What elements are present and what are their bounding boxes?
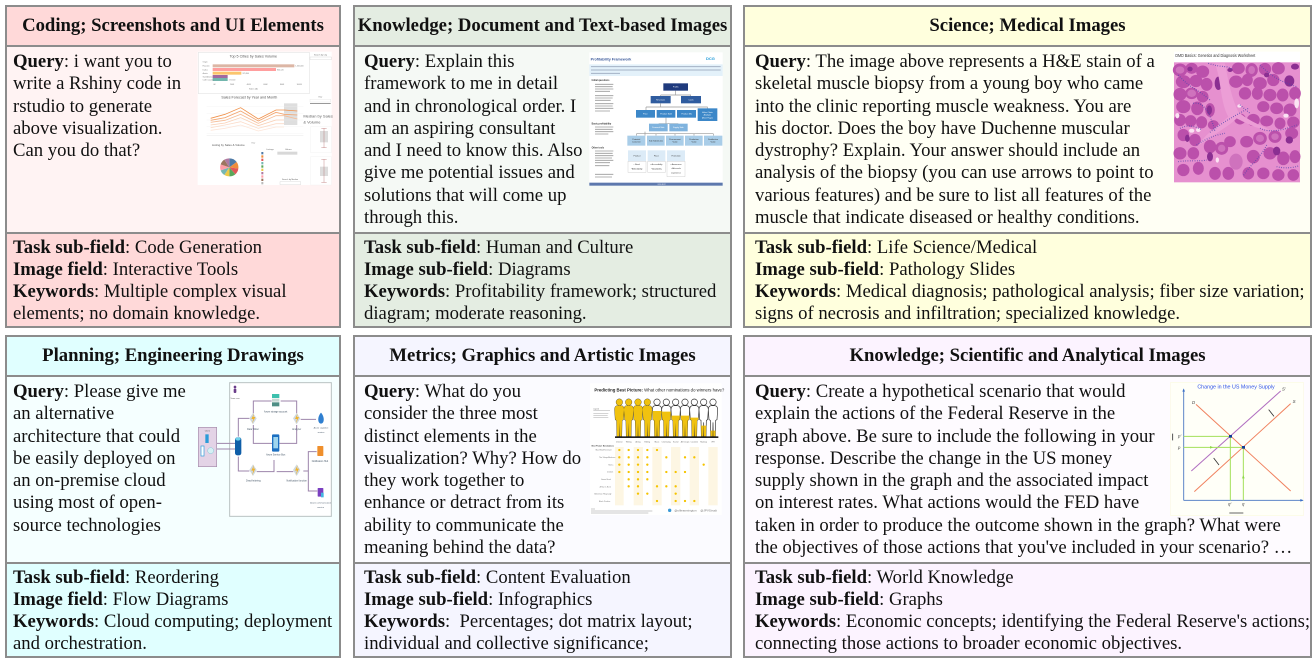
- silhouettes chart: Cinematog.: [662, 441, 671, 444]
- heading: graphics and artistic images: Metrics; Graphics and Artistic Images: [389, 345, 696, 366]
- icon: communication service: [310, 488, 332, 509]
- query text: graphics and artistic images: meaning behind the data?: [364, 537, 555, 558]
- axis labels: q': [1228, 502, 1231, 507]
- metadata: medical images: [745, 232, 1310, 326]
- query text: document images: [364, 51, 583, 228]
- query text: graphics and artistic images: ability to communicate the: [364, 515, 564, 536]
- icon: storage account: Azure storage account: [264, 410, 288, 413]
- intro text band: [589, 64, 723, 76]
- thumbnail: profitability framework: Value: [692, 142, 697, 144]
- slider control: [310, 96, 331, 104]
- thumbnail: best picture infographic: [591, 387, 725, 514]
- bar chart: top 5 cities: 804,120: [277, 69, 284, 71]
- metadata: scientific and analytical images: Keywords: Economic concepts; identifying the Federal Reserve's actions;: [755, 611, 1310, 632]
- footer bar: DCG 2017: [658, 184, 666, 186]
- legend: Legend: [593, 408, 599, 410]
- panel: Planning; Engineering Drawings: [5, 335, 341, 658]
- query text: medical images: analysis of the biopsy (you can use arrows to point to: [755, 162, 1154, 183]
- icon: communication service: service: [317, 506, 325, 509]
- notes and credits: @JPVStrudt: [700, 509, 717, 513]
- metadata: scientific and analytical images: Task sub-field: World Knowledge: [755, 567, 1014, 588]
- heading: coding: [7, 7, 339, 47]
- notes and credits: [591, 509, 717, 513]
- bar chart: top 5 cities: Sales ($): [249, 88, 258, 90]
- query text: document images: give me potential issues and: [364, 162, 575, 183]
- query text: coding: rstudio to generate: [13, 96, 152, 117]
- query text: engineering drawings: using most of open-: [13, 492, 162, 513]
- paler fibers: [1176, 66, 1279, 170]
- query text: scientific and analytical images: the objectives of those actions that you've included in your scenario? …: [755, 537, 1292, 558]
- legend: listings: Listings: [266, 148, 274, 151]
- left column notes: Basic profitability: [592, 122, 612, 125]
- heading: coding: Coding; Screenshots and UI Elements: [22, 15, 324, 36]
- query text: scientific and analytical images: taken in order to produce the outcome shown in the graph? What were: [755, 515, 1281, 536]
- heading: medical images: [745, 7, 1310, 47]
- silhouettes chart: Director: [616, 441, 623, 444]
- metadata: engineering drawings: Keywords: Cloud computing; deployment: [13, 611, 332, 632]
- metadata: engineering drawings: Image field: Flow Diagrams: [13, 589, 228, 610]
- query text: graphics and artistic images: they work together to: [364, 470, 524, 491]
- bar chart: top 5 cities: Houston: [203, 65, 209, 68]
- silhouettes chart: Costume: [691, 441, 698, 444]
- silhouettes chart: Art Design: [681, 441, 689, 444]
- flowchart boxes: Product Mix: [681, 112, 692, 115]
- line chart: sales forecast: [207, 95, 303, 145]
- panel: Knowledge; Scientific and Analytical Images: [743, 335, 1312, 658]
- dot matrix: Best Picture Nominations: [592, 444, 614, 447]
- heading: document images: [355, 7, 730, 47]
- dot matrix: Black Panther: [599, 500, 611, 503]
- thumbnail: profitability framework: Value: [711, 142, 716, 144]
- thumbnail: profitability framework: [589, 52, 723, 186]
- query text: medical images: skeletal muscle biopsy from a young boy who came: [755, 73, 1143, 94]
- thumbnail: architecture flow diagram: [198, 382, 332, 517]
- thumbnail: profitability framework: Sub Substitutes: [649, 139, 663, 142]
- line chart: sales forecast: Year: [251, 143, 256, 145]
- thumbnail: profitability framework: experience: [671, 173, 682, 175]
- query text: coding: write a Rshiny code in: [13, 73, 181, 94]
- dot matrix: Green Book: [601, 479, 611, 481]
- framework title: DCG: [706, 56, 715, 61]
- thumbnail: profitability framework: Promotion: [671, 155, 681, 158]
- footer bar: [589, 183, 723, 186]
- client box: Client: [205, 430, 210, 433]
- graph title: Change in the US Money Supply: [1197, 385, 1275, 391]
- thumbnail: dashboard screenshot: & Volume: [303, 119, 321, 124]
- dot matrix: Bohemian Rhapsody: [594, 494, 611, 496]
- panel: Knowledge; Document and Text-based Images: [353, 5, 732, 328]
- query text: graphics and artistic images: Query: What do you: [364, 381, 521, 402]
- thumbnail: profitability framework: Place: [654, 156, 660, 158]
- flowchart boxes: [636, 83, 717, 131]
- thumbnail: profitability framework: Procurement: [669, 138, 681, 141]
- metadata: medical images: Keywords: Medical diagnosis; pathological analysis; fiber size variation;: [755, 281, 1305, 302]
- query text: medical images: various features) and be sure to list all features of the: [755, 185, 1151, 206]
- heading: graphics and artistic images: [355, 337, 730, 377]
- query text: scientific and analytical images: graph above. Be sure to include the following in your: [755, 426, 1155, 447]
- stroma band: [1198, 63, 1270, 145]
- axis labels: S: [1293, 399, 1296, 404]
- thumbnail: profitability framework: Product: [634, 155, 641, 158]
- heading: scientific and analytical images: Knowledge; Scientific and Analytical Images: [849, 345, 1206, 366]
- query text: medical images: [755, 51, 1155, 228]
- query text: medical images: into the clinic reporting muscle weakness. You are: [755, 96, 1131, 117]
- function icons: Notification function: [287, 480, 308, 483]
- metadata: graphics and artistic images: [355, 562, 730, 656]
- bar chart: top 5 cities: 200K: [230, 84, 235, 86]
- thumbnail: profitability framework: • Awareness: [670, 163, 682, 166]
- metadata: coding: elements; no domain knowledge.: [13, 303, 260, 324]
- query text: coding: [13, 51, 181, 161]
- bar chart: top 5 cities: Top 5 Cities by Sales Volume: [230, 54, 277, 58]
- query text: medical images: Query: The image above represents a H&E stain of a: [755, 51, 1155, 72]
- icon: central database: [235, 437, 241, 455]
- silhouettes chart: Makeup: [700, 442, 707, 444]
- flowchart boxes: Price: [643, 113, 648, 115]
- metadata: graphics and artistic images: Image sub-field: Infographics: [364, 589, 592, 610]
- left column notes: Initial questions: [592, 79, 610, 82]
- bar chart: top 5 cities: Collin County: [203, 78, 214, 81]
- curves: [1191, 391, 1291, 492]
- thumbnail: profitability framework: Potential: [632, 138, 641, 141]
- metadata: coding: Image field: Interactive Tools: [13, 259, 238, 280]
- query text: scientific and analytical images: response. Describe the change in the US money: [755, 448, 1112, 469]
- thumbnail: profitability framework: • Availability: [651, 168, 662, 171]
- query text: document images: am an aspiring consultant: [364, 118, 556, 139]
- query text: graphics and artistic images: distinct elements in the: [364, 426, 537, 447]
- silhouettes chart: Acting: [635, 441, 641, 444]
- pie chart: listing by sales and volume: [212, 143, 245, 176]
- bar chart: top 5 cities: [198, 52, 309, 94]
- thumbnail: profitability framework: Distribution: [708, 138, 718, 141]
- icon: cognitive service: service: [318, 431, 325, 434]
- metadata: scientific and analytical images: [745, 562, 1310, 656]
- metadata: graphics and artistic images: Keywords: Percentages; dot matrix layout;: [364, 611, 693, 632]
- icon: cognitive service: [314, 413, 329, 434]
- dot matrix: The Shape/Birdman: [599, 457, 615, 459]
- panel: Coding; Screenshots and UI Elements: [5, 5, 341, 328]
- query text: scientific and analytical images: [755, 381, 1292, 558]
- small arrows: [1173, 410, 1274, 513]
- thumbnail: profitability framework: • Need: [634, 164, 640, 166]
- icon: data store: Azure Service Bus: [266, 453, 286, 456]
- query text: engineering drawings: source technologies: [13, 515, 161, 536]
- equilibrium points: [1229, 435, 1245, 449]
- metadata: coding: Keywords: Multiple complex visual: [13, 281, 287, 302]
- bar chart: top 5 cities: 1000K: [297, 84, 303, 86]
- flowchart boxes: Revenues: [656, 99, 665, 101]
- connectors: [217, 401, 317, 491]
- bar chart: top 5 cities: 600K: [263, 84, 268, 86]
- thumbnail: profitability framework: • After-sale: [671, 167, 682, 170]
- dot matrix: Roma: [608, 464, 614, 466]
- axis labels: p: [1177, 445, 1181, 450]
- query text: engineering drawings: an alternative: [13, 403, 114, 424]
- query text: medical images: muscle that indicate diseased or healthy conditions.: [755, 207, 1140, 228]
- flowchart boxes: Product Sold: [660, 112, 672, 115]
- bar chart: top 5 cities: Origin: [203, 61, 208, 63]
- icon: notification hub: Notification Hub: [312, 460, 329, 463]
- bar chart: top 5 cities: 370,900: [242, 73, 249, 75]
- equilibrium guide lines: [1184, 436, 1243, 500]
- query text: coding: Query: i want you to: [13, 51, 172, 72]
- query text: medical images: his doctor. Does the boy have Duchenne muscular: [755, 118, 1130, 139]
- worksheet title: DMD Basics: Genetics and Diagnosis Worksheet: [1175, 53, 1256, 58]
- panel: Metrics; Graphics and Artistic Images: [353, 335, 732, 658]
- box plots: [311, 127, 331, 185]
- silhouettes chart: Editing: [645, 441, 650, 444]
- flowchart boxes: Value Chain: [702, 112, 713, 114]
- metadata: engineering drawings: and orchestration.: [13, 633, 147, 654]
- query text: document images: framework to me in detail: [364, 73, 558, 94]
- heading: document images: Knowledge; Document and Text-based Images: [358, 15, 727, 36]
- line chart: sales forecast: Sales Forecast by Year and Month: [221, 95, 277, 99]
- query text: coding: Can you do that?: [13, 140, 140, 161]
- query text: graphics and artistic images: visualization? Why? How do: [364, 448, 581, 469]
- bar chart: top 5 cities: 172,300: [229, 79, 235, 81]
- query text: graphics and artistic images: enhance or detract from its: [364, 492, 564, 513]
- function icons: Dead-lettering: [246, 480, 261, 483]
- query text: document images: through this.: [364, 207, 458, 228]
- thumbnail: profitability framework: Production: [689, 138, 699, 141]
- flowchart boxes: Costs: [688, 98, 694, 101]
- metadata: document images: Keywords: Profitability framework; structured: [364, 281, 716, 302]
- icon: user: [230, 386, 240, 400]
- flowchart boxes: (Next Page): [702, 116, 713, 119]
- query text: document images: Query: Explain this: [364, 51, 515, 72]
- query text: scientific and analytical images: supply shown in the graph and the associated impact: [755, 470, 1148, 491]
- icon: data store: [266, 434, 286, 456]
- flowchart boxes: Supply Side: [673, 127, 685, 129]
- silhouettes chart: VFX: [711, 442, 716, 444]
- panel: Science; Medical Images: [743, 5, 1312, 328]
- silhouettes chart: [615, 399, 718, 444]
- function icons: Data Writer: [247, 428, 259, 431]
- query text: scientific and analytical images: explain the actions of the Federal Reserve in the: [755, 403, 1115, 424]
- dot matrix: Dunkirk: [607, 472, 613, 474]
- label: median by sales and volume: Median by Sales: [303, 114, 333, 119]
- metadata: graphics and artistic images: individual and collective significance;: [364, 633, 649, 654]
- metadata: graphics and artistic images: Task sub-field: Content Evaluation: [364, 567, 631, 588]
- thumbnail: dashboard screenshot: [198, 52, 333, 185]
- silhouettes chart: Writing: [626, 441, 631, 444]
- metadata: medical images: Image sub-field: Pathology Slides: [755, 259, 1015, 280]
- query text: engineering drawings: Query: Please give me: [13, 381, 186, 402]
- legend: [593, 408, 610, 417]
- icon: user: Team user: [230, 398, 240, 400]
- heading: scientific and analytical images: [745, 337, 1310, 377]
- thumbnail: profitability framework: Customer: [632, 141, 641, 144]
- framework title: [591, 56, 715, 62]
- legend: listings: Search by Median: [282, 179, 298, 181]
- thumbnail: profitability framework: • Affordability: [631, 168, 642, 171]
- notes and credits: @ollieasmington: [674, 509, 697, 513]
- bar chart: top 5 cities: Austin: [203, 72, 208, 75]
- infographic title: Predicting Best Picture: What other nominations do winners have?: [594, 387, 725, 392]
- dot matrix: Mad Max/Revenant: [596, 449, 612, 452]
- pie chart: listing by sales and volume: Listing by Sales & Volume: [212, 143, 245, 147]
- legend: listings: [261, 148, 301, 185]
- query text: coding: above visualization.: [13, 118, 162, 139]
- query text: engineering drawings: architecture that could: [13, 426, 180, 447]
- dot matrix: A Star is Born: [600, 485, 611, 488]
- metadata: engineering drawings: [7, 562, 339, 656]
- axis labels: q: [1242, 502, 1245, 507]
- bar chart: top 5 cities: Dallas: [203, 69, 208, 71]
- axis labels: S': [1282, 386, 1286, 391]
- metadata: document images: [355, 232, 730, 326]
- framework title: Profitability Framework: [591, 58, 632, 62]
- client box: [198, 427, 217, 467]
- dot matrix: [592, 444, 718, 505]
- left column notes: Other tools: [592, 146, 605, 149]
- filter control: [310, 53, 331, 60]
- slider control: Year: [318, 96, 323, 98]
- query text: document images: solutions that will come up: [364, 185, 566, 206]
- query text: engineering drawings: [13, 381, 186, 536]
- metadata: scientific and analytical images: Image sub-field: Graphs: [755, 589, 943, 610]
- metadata: scientific and analytical images: connecting those actions to broader economic objectives.: [755, 633, 1182, 654]
- flowchart boxes: Demand Side: [652, 127, 665, 129]
- bar chart: top 5 cities: 0K: [213, 84, 216, 86]
- query text: document images: and in chronological order. I: [364, 96, 576, 117]
- silhouettes chart: Sound: [673, 442, 678, 444]
- icon: notification hub: [312, 446, 329, 463]
- heading: engineering drawings: [7, 337, 339, 377]
- legend: listings: Values: [285, 149, 292, 151]
- query text: graphics and artistic images: consider the three most: [364, 403, 538, 424]
- bar chart: top 5 cities: San Antonio: [203, 75, 213, 78]
- heading: medical images: Science; Medical Images: [929, 15, 1126, 36]
- diagram frame: [230, 383, 331, 516]
- metadata: coding: Task sub-field: Code Generation: [13, 237, 262, 258]
- metadata: document images: Task sub-field: Human and Culture: [364, 237, 633, 258]
- axis labels: [1177, 386, 1296, 507]
- metadata: medical images: signs of necrosis and infiltration; specialized knowledge.: [755, 303, 1180, 324]
- left column notes: [592, 79, 613, 177]
- query text: medical images: dystrophy? Explain. Your answer should include an: [755, 140, 1140, 161]
- metadata: engineering drawings: Task sub-field: Reordering: [13, 567, 219, 588]
- heading: engineering drawings: Planning; Engineering Drawings: [42, 345, 304, 366]
- icon: storage account: [264, 394, 288, 413]
- silhouettes chart: Music: [655, 442, 659, 444]
- icon: cognitive service: Azure cognitive: [314, 426, 329, 429]
- icon: communication service: Azure communication: [310, 501, 332, 504]
- biopsy micrograph: [1174, 62, 1300, 182]
- flowchart connectors: [637, 91, 713, 136]
- function icons: Analyzer: [292, 428, 301, 431]
- thumbnail: profitability framework: Value: [673, 142, 678, 144]
- flowchart boxes: Profits: [673, 86, 679, 89]
- query text: graphics and artistic images: [364, 381, 581, 558]
- query text: scientific and analytical images: Query: Create a hypothetical scenario that would: [755, 381, 1126, 402]
- axes: [1184, 390, 1303, 500]
- metadata: document images: Image sub-field: Diagrams: [364, 259, 571, 280]
- function icons: [246, 413, 308, 483]
- flowchart boxes: Analysis: [704, 114, 711, 117]
- query text: engineering drawings: an on-premise cloud: [13, 470, 166, 491]
- query text: document images: and I need to know this. Also: [364, 140, 583, 161]
- query text: engineering drawings: be easily deployed on: [13, 448, 175, 469]
- axis labels: D: [1192, 400, 1195, 405]
- bar chart: top 5 cities: 1,341,000: [295, 66, 303, 68]
- metadata: document images: diagram; moderate reasoning.: [364, 303, 587, 324]
- query text: scientific and analytical images: on interest rates. What actions would the FED have: [755, 492, 1139, 513]
- metadata: coding: [7, 232, 339, 326]
- axis labels: p': [1177, 433, 1181, 438]
- filter control: Search by City: [314, 53, 327, 56]
- thumbnail: profitability framework: • Accessibility: [650, 163, 662, 166]
- bar chart: top 5 cities: 800K: [280, 84, 285, 86]
- metadata: medical images: Task sub-field: Life Science/Medical: [755, 237, 1037, 258]
- thumbnail: money supply graph: [1170, 382, 1304, 516]
- thumbnail: H&E muscle biopsy: [1172, 52, 1301, 182]
- bar chart: top 5 cities: 400K: [247, 84, 252, 86]
